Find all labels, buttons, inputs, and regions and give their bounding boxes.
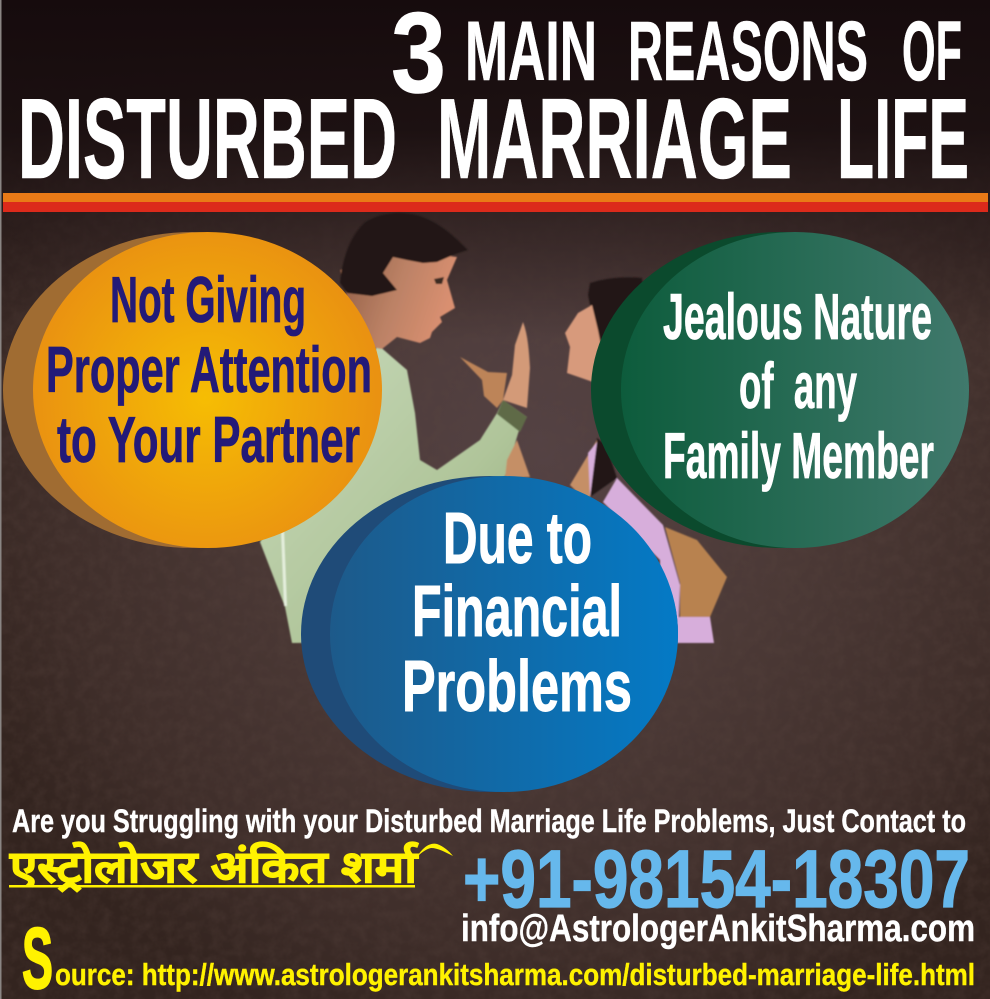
circle: not giving proper attention <box>3 232 382 548</box>
man: pointing hand <box>460 357 507 408</box>
circle text: financial: Problems <box>402 647 632 727</box>
woman: left arm <box>505 440 530 478</box>
woman: hair <box>588 277 650 345</box>
circle text: attention: to Your Partner <box>57 403 360 476</box>
woman: pink top <box>603 478 680 643</box>
circle text: attention <box>46 263 372 476</box>
woman: hair strand <box>590 438 617 497</box>
orange and red divider bar <box>3 193 988 212</box>
man: hair <box>340 213 468 296</box>
circle: due to financial problems <box>301 476 678 792</box>
circle text: attention: Not Giving <box>110 263 306 336</box>
man: raised palm <box>503 322 530 408</box>
woman: shoulder <box>570 440 597 500</box>
title <box>18 0 969 203</box>
title word: main: MAIN <box>465 4 597 98</box>
circle: jealous nature of family member <box>591 232 969 548</box>
man: face <box>340 250 457 349</box>
circle text: financial <box>402 499 632 727</box>
circle text: jealous nature <box>663 280 934 492</box>
circle text: financial: Due to <box>443 499 592 579</box>
hindi name with underline: एस्ट्रोलोजर अंकित शर्मा <box>9 841 419 893</box>
man: sweater <box>260 345 527 643</box>
circle text: attention: Proper Attention <box>46 333 372 406</box>
man: sweater fold <box>281 530 287 606</box>
woman: right arm <box>665 527 727 617</box>
photo: arguing couple <box>260 213 727 643</box>
man: sweater cuff <box>497 400 527 432</box>
circle text: jealous nature: of any <box>739 349 857 422</box>
circle text: financial: Financial <box>412 572 622 652</box>
woman: face <box>565 305 604 382</box>
source link <box>22 911 975 999</box>
man: eye <box>434 277 444 284</box>
title word: disturbed: DISTURBED <box>18 76 397 203</box>
